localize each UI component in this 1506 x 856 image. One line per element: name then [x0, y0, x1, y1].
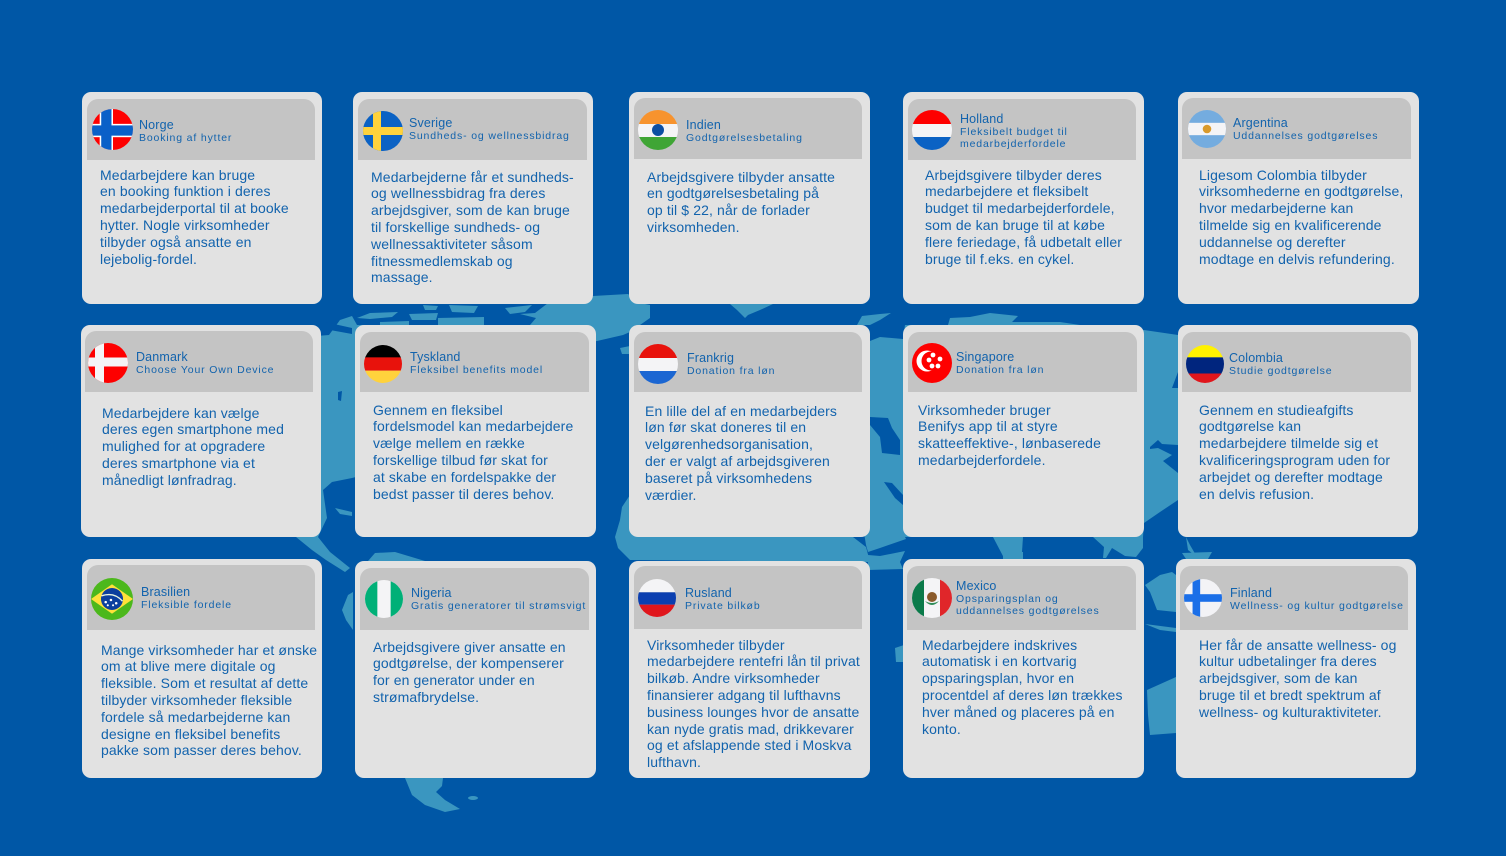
heading: Colombia: Colombia — [1229, 350, 1283, 364]
heading: Indien: Indien — [686, 118, 721, 132]
heading: Tyskland — [410, 350, 543, 376]
text: Argentina: tilmelde sig en kvalificerende — [1199, 217, 1382, 233]
header band: Sverige — [358, 99, 587, 160]
panel: Danmark — [81, 325, 321, 537]
icon: Finland flag — [1184, 579, 1222, 617]
icon: Mexico flag — [912, 578, 952, 618]
icon: Russia flag — [638, 579, 676, 617]
text: Mexico: konto. — [922, 721, 961, 737]
header band: Brasilien — [87, 565, 315, 630]
text: Argentina: virksomhederne en godtgørelse, — [1199, 183, 1403, 199]
text: Indien: Arbejdsgivere tilbyder ansatte — [647, 169, 835, 185]
heading: Holland: medarbejderfordele — [960, 138, 1066, 150]
heading: Brasilien: Brasilien — [141, 584, 190, 598]
text: Singapore: skatteeffektive-, lønbaserede — [918, 435, 1101, 451]
heading: Holland — [960, 112, 1068, 150]
text: Holland: budget til medarbejderfordele, — [925, 200, 1115, 216]
text: Sverige: wellnessaktiviteter såsom — [371, 236, 533, 252]
heading: Mexico: Mexico — [956, 578, 996, 592]
text: Norge: Medarbejdere kan bruge — [100, 167, 255, 183]
header band: Danmark — [85, 331, 313, 392]
text: Holland: bruge til f.eks. en cykel. — [925, 251, 1074, 267]
text: Sverige — [371, 169, 574, 285]
text: Holland — [925, 167, 1122, 267]
text: Frankrig: baseret på virksomhedens — [645, 470, 812, 486]
text: Rusland — [647, 637, 860, 770]
text: Argentina: uddannelse og derefter — [1199, 234, 1346, 250]
text: Colombia: en delvis refusion. — [1199, 486, 1314, 502]
heading: Indien: Godtgørelsesbetaling — [686, 132, 803, 144]
text: Rusland: business lounges hvor de ansatte — [647, 704, 859, 720]
text: Singapore: Virksomheder bruger — [918, 402, 1051, 418]
text: Frankrig: løn før skat doneres til en — [645, 419, 806, 435]
text: Brasilien: om at blive mere digitale og — [101, 658, 276, 674]
panel: Norge — [82, 92, 322, 304]
panel: Sverige — [353, 92, 593, 304]
header band: Norge — [87, 99, 315, 160]
text: Tyskland: at skabe en fordelspakke der — [373, 469, 556, 485]
text: Colombia: arbejdet og derefter modtage — [1199, 469, 1383, 485]
heading: Sverige: Sverige — [409, 116, 452, 130]
text: Rusland: bilkøb. Andre virksomheder — [647, 670, 820, 686]
heading: Tyskland: Fleksibel benefits model — [410, 364, 543, 376]
text: Sverige: fitnessmedlemskab og — [371, 253, 513, 269]
header band: Tyskland — [360, 332, 589, 392]
heading: Sverige — [409, 116, 570, 142]
heading: Argentina — [1233, 116, 1378, 142]
text: Frankrig: velgørenhedsorganisation, — [645, 436, 813, 452]
icon: India flag — [638, 110, 678, 150]
heading: Colombia: Studie godtgørelse — [1229, 364, 1332, 376]
text: Tyskland: fordelsmodel kan medarbejdere — [373, 418, 573, 434]
icon: Sweden flag — [363, 111, 403, 151]
heading: Frankrig: Frankrig — [687, 350, 734, 364]
header band: Mexico — [907, 566, 1136, 630]
icon: Argentina flag — [1188, 110, 1226, 148]
heading: Sverige: Sundheds- og wellnessbidrag — [409, 130, 570, 142]
text: Brasilien: pakke som passer deres behov. — [101, 742, 302, 758]
icon: Netherlands flag — [912, 110, 952, 150]
heading: Finland — [1230, 586, 1404, 612]
text: Tyskland: Gennem en fleksibel — [373, 402, 503, 418]
text: Nigeria: strømafbrydelse. — [373, 689, 479, 705]
text: Sverige: og wellnessbidrag fra deres — [371, 185, 545, 201]
heading: Singapore — [956, 350, 1044, 376]
heading: Indien — [686, 118, 803, 144]
heading: Holland: Fleksibelt budget til — [960, 126, 1068, 138]
panel: Tyskland — [355, 325, 596, 537]
text: Sverige: arbejdsgiver, som de kan bruge — [371, 202, 570, 218]
heading: Frankrig: Donation fra løn — [687, 364, 775, 376]
text: Colombia: medarbejdere tilmelde sig et — [1199, 435, 1378, 451]
text: Argentina — [1199, 167, 1403, 267]
text: Argentina: modtage en delvis refundering. — [1199, 251, 1395, 267]
text: Danmark: Medarbejdere kan vælge — [102, 405, 260, 421]
text: Mexico — [922, 637, 1123, 737]
header band: Colombia — [1182, 332, 1411, 392]
panel: Argentina — [1178, 92, 1419, 304]
text: Singapore: medarbejderfordele. — [918, 452, 1046, 468]
panel: Indien — [629, 92, 870, 304]
text: Nigeria: Arbejdsgivere giver ansatte en — [373, 639, 566, 655]
text: Norge: lejebolig-fordel. — [100, 251, 197, 267]
text: Norge — [100, 167, 289, 267]
text: Tyskland: forskellige tilbud før skat for — [373, 452, 548, 468]
panel: Frankrig — [629, 325, 870, 537]
text: Holland: Arbejdsgivere tilbyder deres — [925, 167, 1102, 183]
heading: Nigeria: Nigeria — [411, 586, 452, 600]
panel: Finland — [1176, 559, 1416, 778]
heading: Argentina: Uddannelses godtgørelses — [1233, 130, 1378, 142]
heading: Brasilien — [141, 584, 232, 610]
text: Brasilien: fordele så medarbejderne kan — [101, 709, 290, 725]
icon: Norway flag — [92, 109, 133, 150]
heading: Danmark: Choose Your Own Device — [136, 364, 274, 376]
text: Nigeria: for en generator under en — [373, 672, 535, 688]
text: Norge: en booking funktion i deres — [100, 183, 271, 199]
text: Colombia — [1199, 402, 1390, 502]
header band: Finland — [1180, 566, 1408, 630]
icon: Frankrig flag — [638, 344, 678, 384]
icon: Denmark flag — [88, 343, 128, 383]
text: Indien: virksomheden. — [647, 219, 740, 235]
heading: Brasilien: Fleksible fordele — [141, 598, 232, 610]
icon: Germany flag — [364, 345, 402, 383]
icon: Nigeria flag — [365, 580, 403, 618]
text: Rusland: finansierer adgang til lufthavns — [647, 687, 841, 703]
heading: Tyskland: Tyskland — [410, 350, 461, 364]
text: Brasilien — [101, 642, 317, 758]
text: Tyskland: bedst passer til deres behov. — [373, 486, 554, 502]
text: Holland: flere feriedage, få udbetalt eller — [925, 234, 1122, 250]
text: Finland: arbejdsgiver, som de kan — [1199, 670, 1358, 686]
text: Mexico: opsparingsplan, hvor en — [922, 670, 1074, 686]
icon: Brazil flag — [91, 578, 133, 620]
text: Sverige: til forskellige sundheds- og — [371, 219, 540, 235]
text: Argentina: Ligesom Colombia tilbyder — [1199, 167, 1367, 183]
heading: Nigeria — [411, 586, 586, 612]
text: Finland — [1199, 637, 1396, 721]
text: Danmark: mulighed for at opgradere — [102, 438, 265, 454]
text: Brasilien: designe en fleksibel benefits — [101, 726, 280, 742]
panel: Brasilien — [82, 559, 322, 778]
text: Brasilien: tilbyder virksomheder fleksible — [101, 692, 292, 708]
heading: Colombia — [1229, 350, 1332, 376]
panel: Colombia — [1178, 325, 1418, 537]
header band: Nigeria — [360, 568, 589, 630]
text: Rusland: Virksomheder tilbyder — [647, 637, 785, 653]
text: Norge: tilbyder også ansatte en — [100, 234, 252, 250]
text: Finland: kultur udbetalinger fra deres — [1199, 653, 1377, 669]
text: Holland: medarbejdere et fleksibelt — [925, 183, 1088, 199]
text: Frankrig: værdier. — [645, 487, 697, 503]
text: Indien — [647, 169, 835, 235]
header band: Argentina — [1182, 98, 1411, 159]
text: Finland: Her får de ansatte wellness- og — [1199, 637, 1396, 653]
text: Brasilien: Mange virksomheder har et ønske — [101, 642, 317, 658]
text: Mexico: Medarbejdere indskrives — [922, 637, 1077, 653]
heading: Rusland: Private bilkøb — [685, 600, 761, 612]
text: Colombia: godtgørelse kan — [1199, 418, 1301, 434]
header band: Indien — [634, 98, 862, 159]
text: Brasilien: fleksible. Som et resultat af dette — [101, 675, 308, 691]
text: Tyskland — [373, 402, 573, 502]
text: Colombia: kvalificeringsprogram uden for — [1199, 452, 1390, 468]
text: Indien: op til $ 22, når de forlader — [647, 202, 810, 218]
header band: Singapore — [908, 332, 1137, 392]
text: Sverige: massage. — [371, 269, 433, 285]
heading: Norge: Booking af hytter — [139, 132, 232, 144]
text: Frankrig: En lille del af en medarbejders — [645, 403, 837, 419]
header band: Frankrig — [634, 332, 862, 392]
text: Norge: hytter. Nogle virksomheder — [100, 217, 270, 233]
text: Rusland: medarbejdere rentefri lån til privat — [647, 653, 860, 669]
heading: Rusland — [685, 586, 761, 612]
text: Finland: wellness- og kulturaktiviteter. — [1199, 704, 1382, 720]
text: Nigeria: godtgørelse, der kompenserer — [373, 655, 564, 671]
text: Argentina: hvor medarbejderne kan — [1199, 200, 1353, 216]
heading: Norge — [139, 118, 232, 144]
icon: Singapore flag — [912, 343, 952, 383]
text: Danmark: deres smartphone via et — [102, 455, 255, 471]
header band: Rusland — [634, 566, 862, 629]
heading: Mexico: Opsparingsplan og — [956, 592, 1059, 604]
heading: Finland: Wellness- og kultur godtgørelse — [1230, 600, 1404, 612]
panel: Singapore — [903, 325, 1144, 537]
text: Finland: bruge til et bredt spektrum af — [1199, 687, 1381, 703]
heading: Rusland: Rusland — [685, 586, 732, 600]
header band: Holland — [908, 99, 1136, 160]
heading: Danmark — [136, 350, 274, 376]
panel: Rusland — [629, 561, 870, 778]
heading: Holland: Holland — [960, 112, 1003, 126]
text: Sverige: Medarbejderne får et sundheds- — [371, 169, 574, 185]
text: Mexico: automatisk i en kortvarig — [922, 653, 1077, 669]
icon: Colombia flag — [1186, 345, 1224, 383]
panel: Holland — [903, 92, 1144, 304]
heading: Norge: Norge — [139, 118, 174, 132]
heading: Finland: Finland — [1230, 586, 1272, 600]
heading: Singapore: Singapore — [956, 350, 1014, 364]
text: Frankrig: der er valgt af arbejdsgiveren — [645, 453, 830, 469]
heading: Argentina: Argentina — [1233, 116, 1288, 130]
text: Nigeria — [373, 639, 566, 705]
text: Mexico: procentdel af deres løn trækkes — [922, 687, 1123, 703]
text: Danmark — [102, 405, 284, 488]
text: Indien: en godtgørelsesbetaling på — [647, 185, 819, 201]
panel: Nigeria — [355, 561, 596, 778]
text: Mexico: hver måned og placeres på en — [922, 704, 1114, 720]
text: Norge: medarbejderportal til at booke — [100, 200, 289, 216]
text: Danmark: månedligt lønfradrag. — [102, 472, 237, 488]
text: Danmark: deres egen smartphone med — [102, 421, 284, 437]
text: Singapore: Benifys app til at styre — [918, 418, 1058, 434]
heading: Danmark: Danmark — [136, 350, 188, 364]
text: Tyskland: vælge mellem en række — [373, 435, 525, 451]
text: Rusland: kan nyde gratis mad, drikkevarer — [647, 721, 854, 737]
text: Rusland: og et afslappende sted i Moskva — [647, 737, 852, 753]
panel: Mexico — [903, 559, 1144, 778]
text: Holland: som de kan bruge til at købe — [925, 217, 1105, 233]
heading: Nigeria: Gratis generatorer til strømsvigt — [411, 600, 586, 612]
heading: Singapore: Donation fra løn — [956, 364, 1044, 376]
text: Frankrig — [645, 403, 837, 503]
text: Singapore — [918, 402, 1101, 468]
heading: Mexico: uddannelses godtgørelses — [956, 605, 1100, 617]
heading: Mexico — [956, 580, 1100, 618]
heading: Frankrig — [687, 350, 775, 376]
text: Colombia: Gennem en studieafgifts — [1199, 402, 1354, 418]
text: Rusland: lufthavn. — [647, 754, 701, 770]
